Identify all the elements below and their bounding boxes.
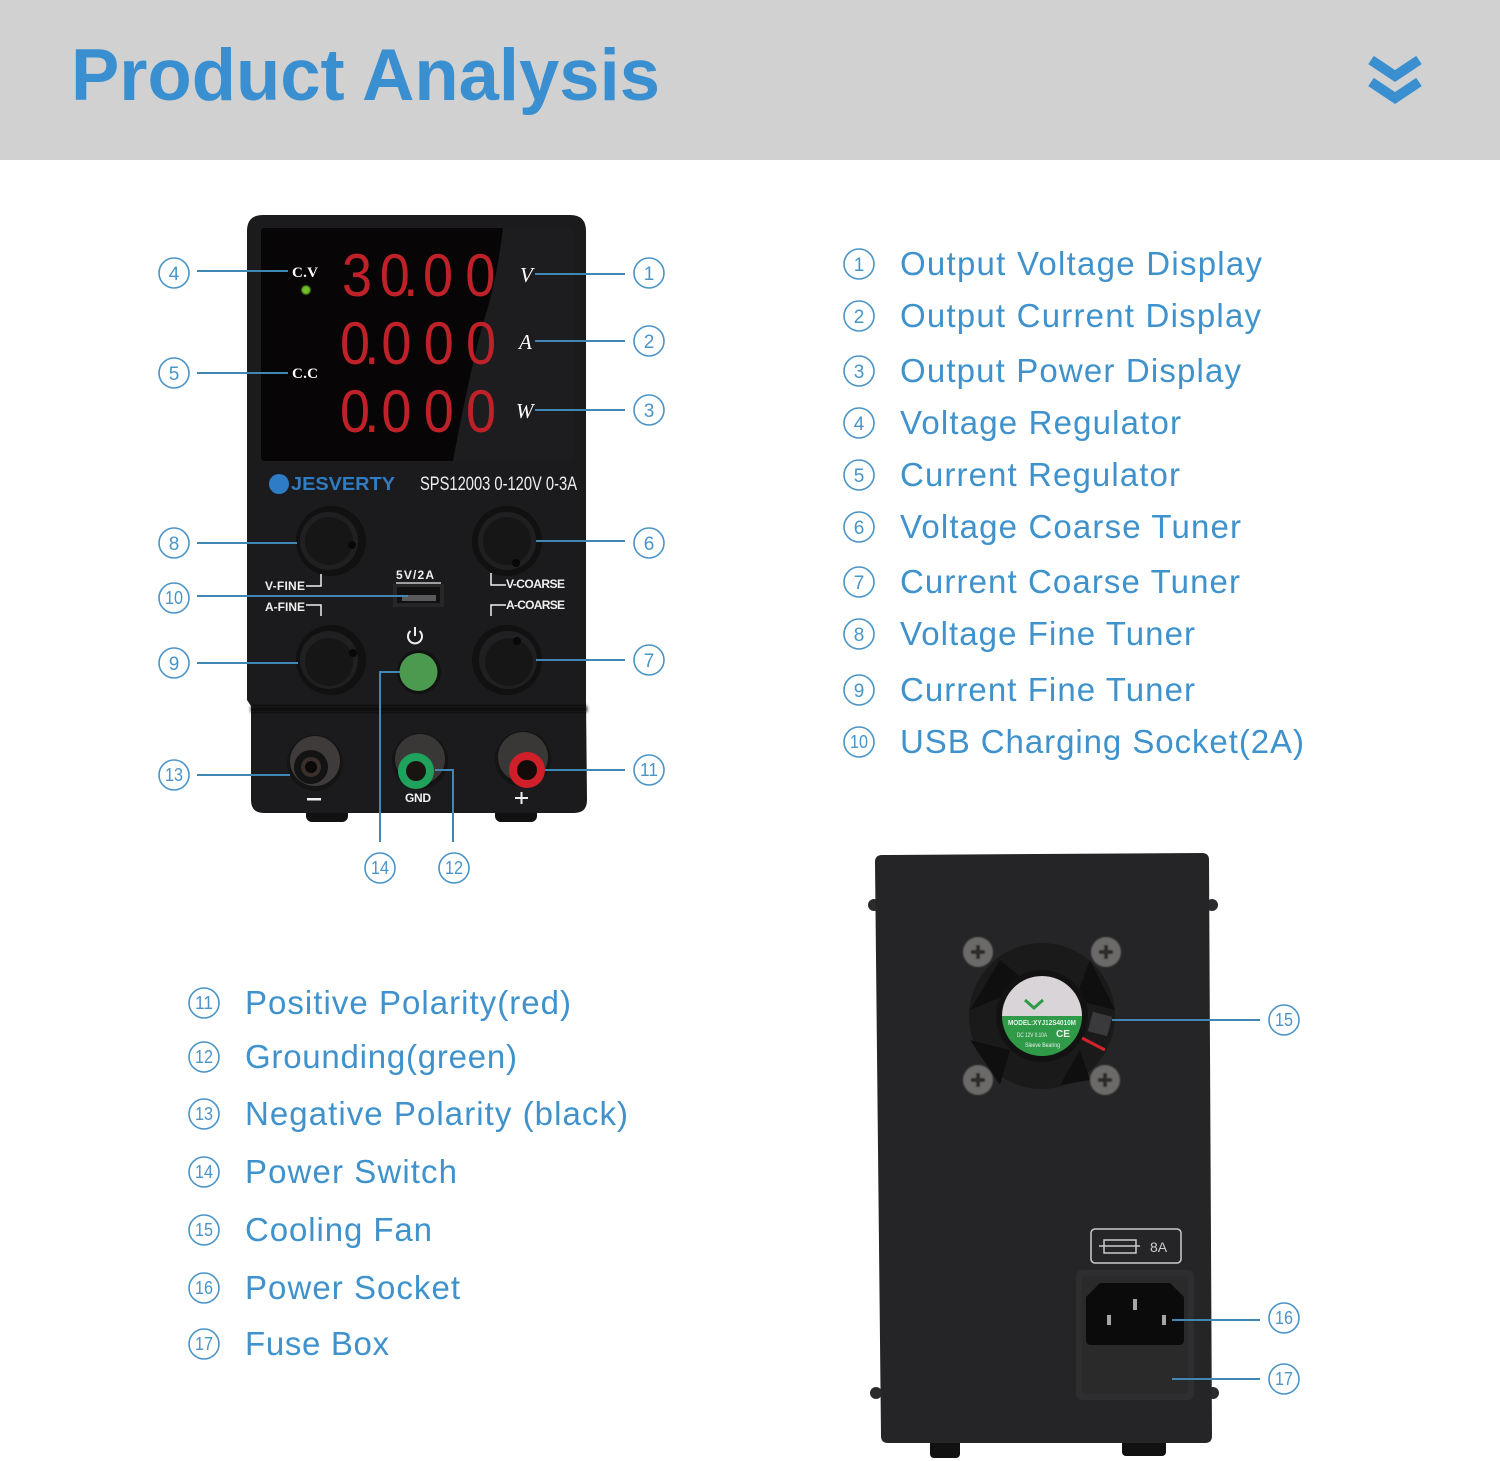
header band xyxy=(0,0,1500,160)
legend list 11 to 17: 16 xyxy=(195,1278,213,1298)
panel body xyxy=(247,215,587,813)
legend list 1 to 10: 3 xyxy=(854,362,864,383)
label A-FINE xyxy=(265,600,321,616)
legend list 1 to 10: Voltage Coarse Tuner xyxy=(900,508,1241,545)
minus sign xyxy=(307,798,321,800)
callout numbers front panel: 13 xyxy=(165,765,183,785)
callout numbers front panel: 3 xyxy=(644,401,654,422)
feet xyxy=(306,808,537,822)
legend list 1 to 10: USB Charging Socket(2A) xyxy=(900,723,1304,760)
fan label: CE xyxy=(1056,1029,1070,1040)
plus sign xyxy=(515,792,528,804)
fan label: MODEL:XYJ12S4010M xyxy=(1008,1018,1076,1027)
callout numbers front panel: 7 xyxy=(644,651,654,672)
legend list 1 to 10: 10 xyxy=(850,732,868,752)
unit V: V xyxy=(520,263,535,287)
unit W: W xyxy=(516,399,536,423)
callout 15 xyxy=(1269,1005,1299,1035)
knob A-coarse xyxy=(472,625,542,695)
leader lines front panel xyxy=(197,271,625,842)
legend list 1 to 10: 1 xyxy=(854,255,864,276)
unit A: A xyxy=(517,330,532,354)
label V-FINE: V-FINE xyxy=(265,579,305,593)
callout numbers front panel: 2 xyxy=(644,332,654,353)
legend list 11 to 17: 13 xyxy=(195,1104,213,1124)
legend list 11 to 17: 12 xyxy=(195,1047,213,1067)
side screws xyxy=(868,899,1219,1399)
power socket and fuse box xyxy=(1076,1270,1194,1400)
legend list 11 to 17: Power Socket xyxy=(245,1269,460,1306)
legend list 11 to 17: Fuse Box xyxy=(245,1325,390,1362)
callout 16 xyxy=(1269,1303,1299,1333)
legend list 11 to 17: Power Switch xyxy=(245,1153,457,1190)
legend list 1 to 10: Current Regulator xyxy=(900,456,1180,493)
rear body xyxy=(875,853,1212,1443)
legend list 1 to 10: 8 xyxy=(854,625,864,646)
icon: power symbol xyxy=(408,627,422,643)
fan label: Sleeve Bearing xyxy=(1025,1043,1060,1049)
fan label xyxy=(1002,976,1082,1056)
label A-COARSE xyxy=(491,598,565,616)
legend list 1 to 10: 4 xyxy=(854,414,865,435)
legend list 11 to 17: 11 xyxy=(195,993,213,1013)
brand logo: JESVERTY xyxy=(291,474,395,494)
title: Product Analysis xyxy=(71,35,660,116)
callout 15: 15 xyxy=(1275,1010,1293,1030)
callout 16: 16 xyxy=(1275,1308,1293,1328)
legend list 11 to 17: Cooling Fan xyxy=(245,1211,432,1248)
rear view product xyxy=(868,853,1219,1458)
callout numbers front panel: 4 xyxy=(169,264,180,285)
feet xyxy=(930,1438,1166,1458)
legend list 11 to 17: Grounding(green) xyxy=(245,1038,517,1075)
callout numbers front panel: 10 xyxy=(165,588,183,608)
GND label: GND xyxy=(405,791,431,805)
callout numbers front panel: 12 xyxy=(445,858,463,878)
legend list 1 to 10: 6 xyxy=(854,518,864,539)
legend list 11 to 17: 14 xyxy=(195,1162,213,1182)
callout numbers front panel: 14 xyxy=(371,858,389,878)
indicator label C.C: C.C xyxy=(292,366,318,382)
legend list 1 to 10: 5 xyxy=(854,466,864,487)
mounting screws xyxy=(963,937,1121,1095)
label A-FINE: A-FINE xyxy=(265,600,305,614)
legend list 1 to 10: 7 xyxy=(854,573,864,594)
label V-COARSE: V-COARSE xyxy=(506,577,565,591)
knob A-fine xyxy=(296,625,366,695)
leader lines rear view xyxy=(1112,1020,1260,1379)
negative terminal xyxy=(287,735,343,791)
legend list 1 to 10: Current Coarse Tuner xyxy=(900,563,1240,600)
callout numbers front panel: 8 xyxy=(169,534,179,555)
current readout: 0.000 xyxy=(340,310,496,378)
knob V-fine xyxy=(296,506,366,576)
positive terminal xyxy=(495,731,551,788)
power readout: 0.000 xyxy=(340,378,496,446)
legend list 11 to 17: Negative Polarity (black) xyxy=(245,1095,628,1132)
panel ridge xyxy=(251,706,587,712)
callout numbers front panel: 11 xyxy=(640,760,658,780)
legend list 11 to 17: Positive Polarity(red) xyxy=(245,984,571,1021)
legend list 1 to 10: Current Fine Tuner xyxy=(900,671,1195,708)
label V-COARSE xyxy=(491,573,565,591)
callout numbers front panel xyxy=(159,258,664,883)
callout numbers front panel: 6 xyxy=(644,534,654,555)
front panel product xyxy=(247,215,587,822)
callout numbers front panel: 1 xyxy=(644,264,654,285)
voltage readout: 30.00 xyxy=(342,242,495,310)
legend list 1 to 10: Output Power Display xyxy=(900,352,1242,389)
ground terminal xyxy=(392,733,448,789)
display window xyxy=(261,228,574,461)
fan wires xyxy=(1082,1038,1105,1050)
fuse rating plate xyxy=(1091,1229,1181,1263)
callout 17: 17 xyxy=(1275,1369,1293,1389)
icon: double chevron xyxy=(1371,60,1419,98)
indicator LED xyxy=(302,286,310,294)
callout 17 xyxy=(1269,1364,1299,1394)
legend list 11 to 17 xyxy=(189,984,628,1362)
model text: SPS12003 0-120V 0-3A xyxy=(420,474,577,495)
legend list 1 to 10: 2 xyxy=(854,307,864,328)
USB socket xyxy=(393,568,444,607)
legend list 1 to 10: Voltage Fine Tuner xyxy=(900,615,1195,652)
knob V-coarse xyxy=(472,506,542,576)
USB socket: 5V/2A xyxy=(396,568,434,582)
callout numbers front panel: 9 xyxy=(169,654,179,675)
fan label: DC 12V 0.10A xyxy=(1017,1033,1047,1039)
power button xyxy=(397,650,441,694)
legend list 11 to 17: 15 xyxy=(195,1220,213,1240)
fuse rating plate: 8A xyxy=(1150,1239,1168,1255)
legend list 1 to 10: Voltage Regulator xyxy=(900,404,1181,441)
callout numbers front panel: 5 xyxy=(169,364,179,385)
legend list 1 to 10: Output Current Display xyxy=(900,297,1262,334)
legend list 1 to 10 xyxy=(844,245,1304,760)
legend list 11 to 17: 17 xyxy=(195,1334,213,1354)
legend list 1 to 10: Output Voltage Display xyxy=(900,245,1262,282)
indicator label C.V: C.V xyxy=(292,265,318,281)
legend list 1 to 10: 9 xyxy=(854,681,864,702)
label V-FINE xyxy=(265,574,321,593)
fan xyxy=(969,943,1115,1089)
label A-COARSE: A-COARSE xyxy=(506,598,565,612)
